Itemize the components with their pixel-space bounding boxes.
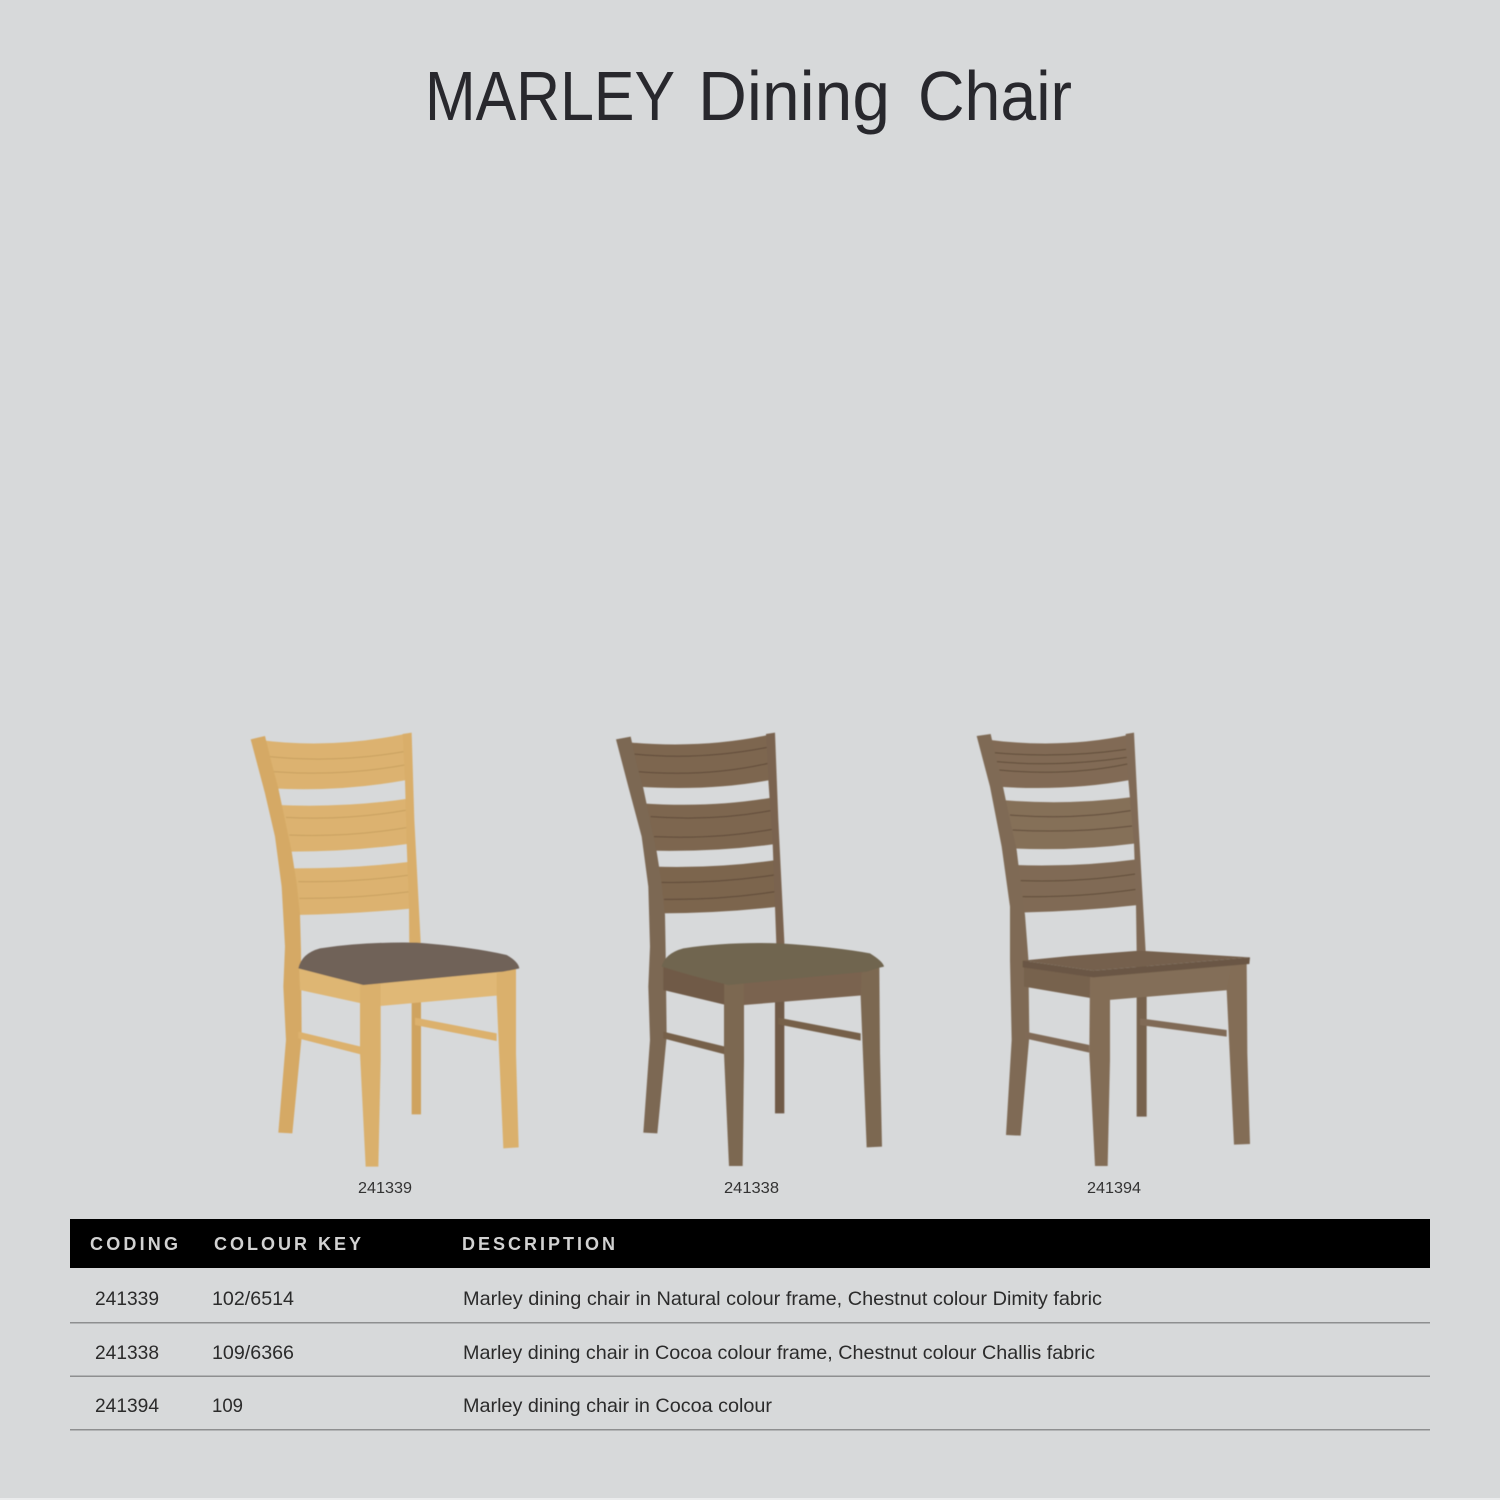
table row 241339: 102/6514	[212, 1288, 294, 1310]
table row 241338: Marley dining chair in Cocoa colour frame, Chestnut colour Challis fabric	[463, 1342, 1095, 1364]
chair: 241338 cocoa frame with fabric seat	[616, 733, 884, 1166]
table row 241338: 241338	[95, 1342, 159, 1364]
table header: DESCRIPTION	[462, 1234, 615, 1254]
chair 241339 label: 241339	[358, 1180, 412, 1197]
table header: CODING	[90, 1234, 178, 1254]
title: Dining	[698, 57, 890, 135]
title: Chair	[918, 57, 1072, 135]
table	[70, 1219, 1430, 1430]
chair: 241339 natural frame with fabric seat	[251, 733, 519, 1167]
table row 241339: 241339	[95, 1288, 159, 1310]
table row 241394: 241394	[95, 1395, 159, 1417]
table header	[70, 1219, 1430, 1268]
table row 241394: Marley dining chair in Cocoa colour	[463, 1395, 773, 1417]
table row 241394: 109	[212, 1395, 243, 1417]
table row 241339: Marley dining chair in Natural colour frame, Chestnut colour Dimity fabric	[463, 1288, 1102, 1310]
chair: 241394 cocoa frame with wooden seat	[977, 733, 1250, 1166]
title: MARLEY	[425, 57, 675, 135]
table row 241338	[70, 1342, 1430, 1377]
table row 241339	[70, 1288, 1430, 1324]
chair 241338 label: 241338	[724, 1180, 779, 1197]
title	[425, 57, 1072, 135]
table row 241338: 109/6366	[212, 1342, 294, 1364]
table row 241394	[70, 1395, 1430, 1430]
table header: COLOUR KEY	[214, 1234, 361, 1254]
chair 241394 label: 241394	[1087, 1180, 1141, 1197]
